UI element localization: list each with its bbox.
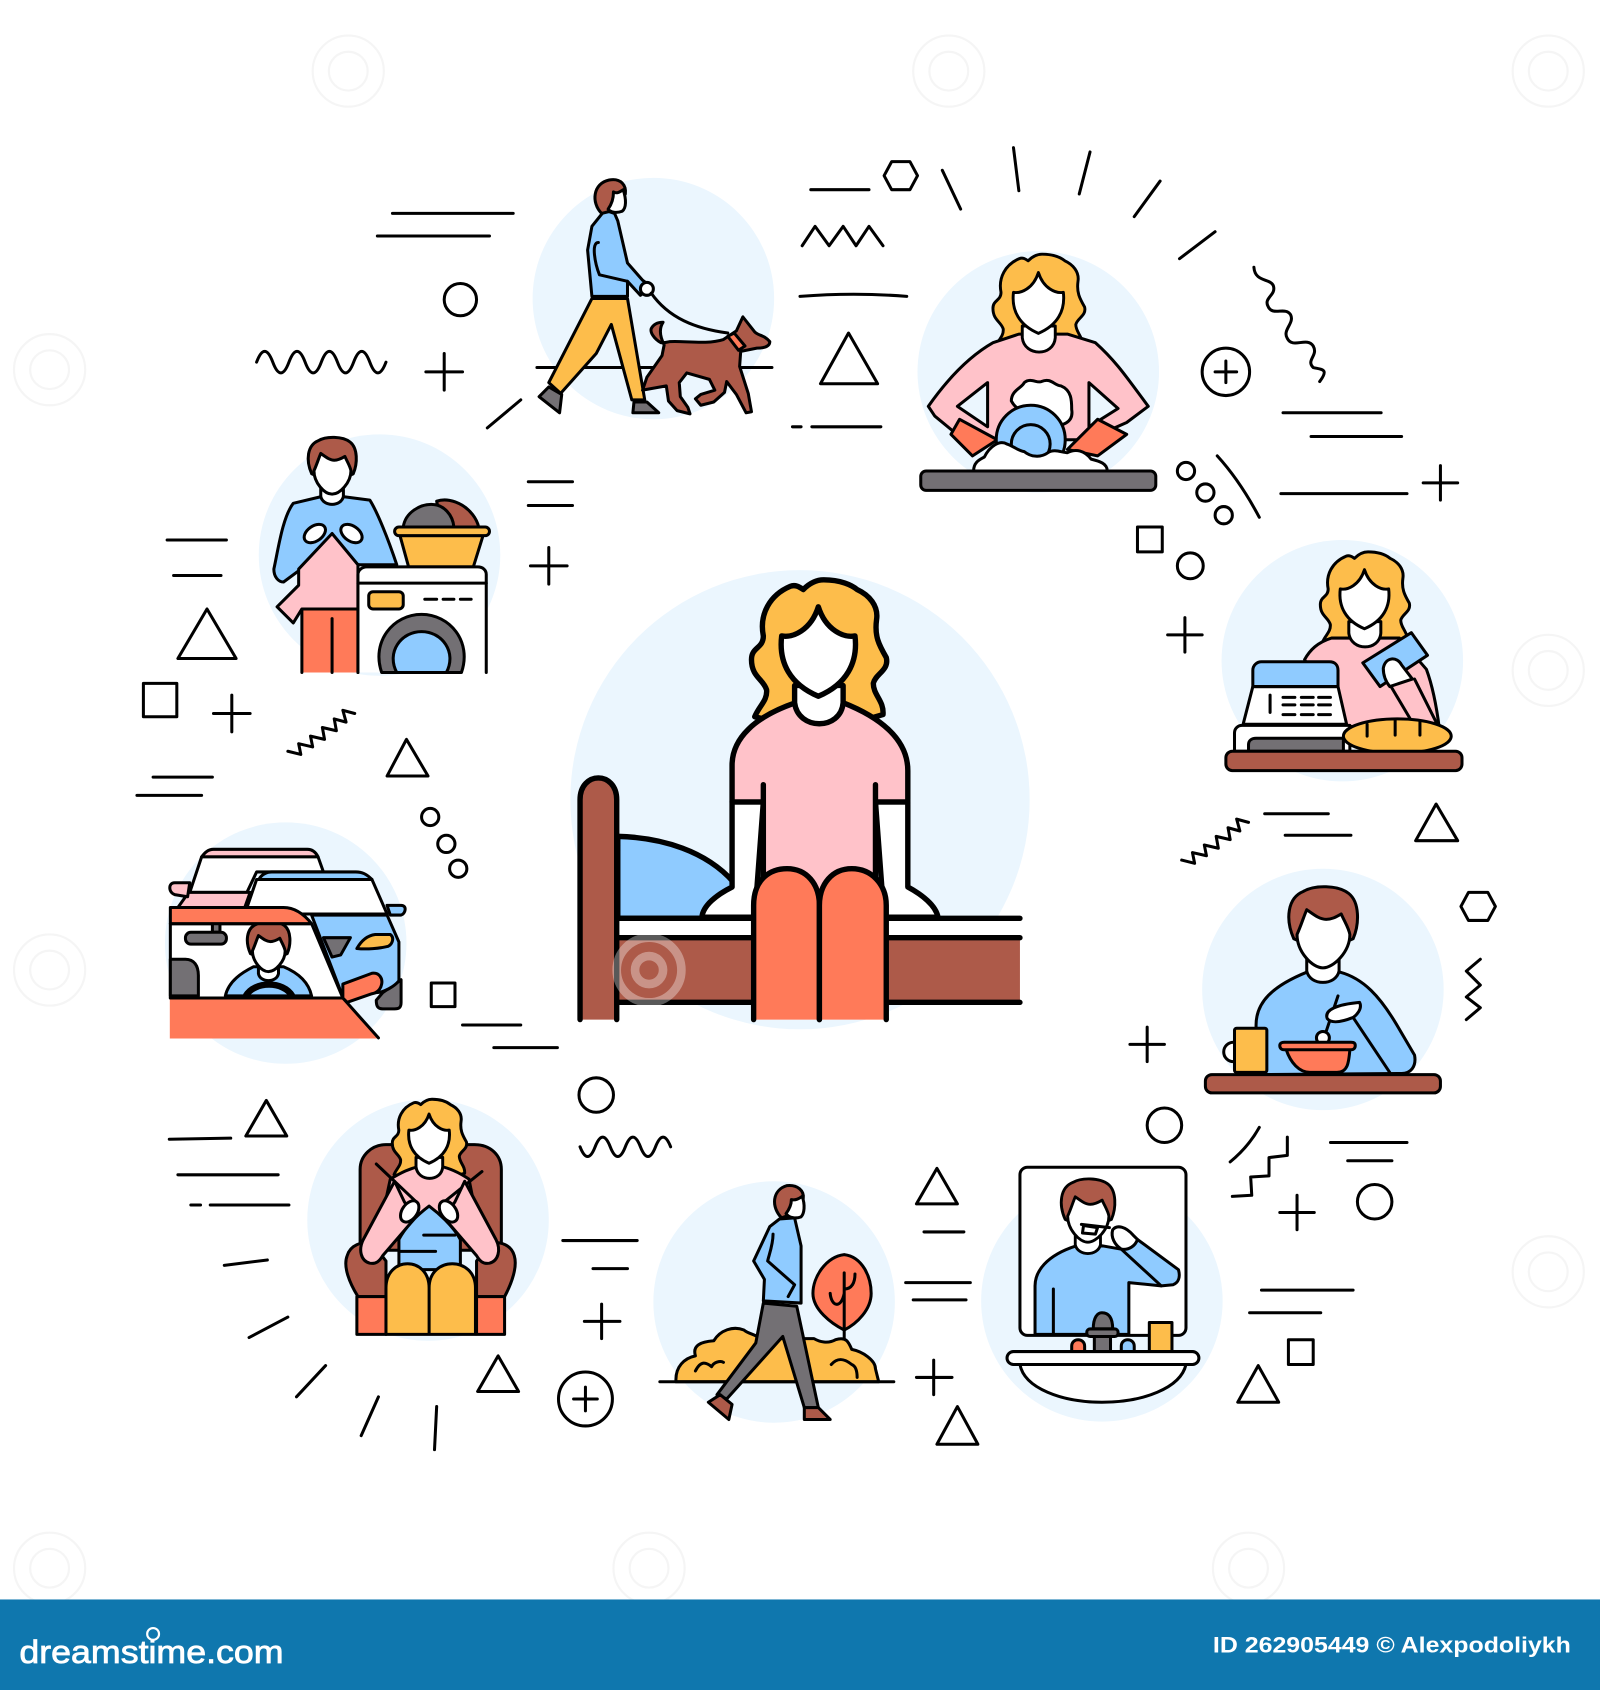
illustration: woman washing dishes (918, 251, 1159, 493)
pink clothing (277, 534, 358, 623)
sink basin (1020, 1365, 1186, 1402)
hair (993, 254, 1085, 358)
blue sweater (1256, 972, 1415, 1075)
illustration: man walking in park (653, 1181, 895, 1423)
illustration: woman at cash register (1222, 540, 1463, 781)
face and neck (409, 1114, 450, 1178)
pink sweater (928, 334, 1148, 440)
bed headboard post (580, 778, 617, 1020)
blue car (245, 872, 405, 1009)
hand (1383, 659, 1412, 687)
cash register drawer (1249, 738, 1343, 751)
shoes (708, 1395, 830, 1419)
display buttons (1270, 695, 1330, 715)
card (1363, 633, 1427, 687)
foam at sink (974, 443, 1107, 471)
bush marks (695, 1360, 857, 1377)
bottles and cup (1072, 1322, 1172, 1352)
blue sweater (1035, 1239, 1179, 1334)
banner footer (0, 1599, 1600, 1690)
face and neck (781, 607, 856, 724)
background circle (165, 822, 406, 1064)
hair (1320, 552, 1410, 653)
decorative shapes: top right burst (942, 148, 1458, 652)
background circle (307, 1099, 549, 1341)
hands (301, 521, 366, 546)
decorative shapes: lower right (1130, 1027, 1407, 1402)
background circle (259, 434, 500, 676)
background circle (1202, 869, 1444, 1110)
face and neck (1340, 570, 1389, 647)
trousers (302, 607, 358, 673)
illustration: man doing laundry (259, 434, 500, 676)
side mirror (343, 973, 382, 1002)
illustration: man brushing teeth (981, 1167, 1223, 1422)
pillow (618, 836, 733, 918)
background circle (570, 570, 1030, 1029)
shoes (539, 387, 659, 413)
trousers (717, 1303, 818, 1408)
armchair back (360, 1145, 501, 1250)
hair (392, 1099, 467, 1183)
decorative shapes: top centre (792, 162, 918, 427)
cash register top (1253, 662, 1338, 687)
watermark on bed (617, 938, 681, 1002)
forearm line (1353, 1017, 1390, 1072)
trouser seam (331, 619, 333, 673)
sleeve line (594, 243, 627, 281)
car bonnet (170, 998, 378, 1038)
decorative shapes: top left (257, 213, 573, 584)
background circle (653, 1181, 895, 1423)
hand and spoon (1316, 996, 1360, 1044)
background circle (533, 178, 774, 419)
arm line (1390, 679, 1439, 729)
rear view mirror (185, 923, 226, 944)
counter (1205, 1075, 1440, 1093)
cloth lines (400, 1235, 455, 1251)
trousers (549, 299, 645, 400)
mirror (1020, 1167, 1186, 1335)
hair (751, 580, 887, 733)
decorative shapes: right (1182, 804, 1495, 1020)
jacket (754, 1218, 801, 1303)
pink car (170, 849, 323, 908)
car roof strip (170, 908, 312, 924)
faucet (1087, 1313, 1118, 1352)
dog (643, 317, 770, 414)
counter (1226, 751, 1462, 771)
hands (397, 1197, 462, 1225)
illustration: man driving in traffic (165, 822, 406, 1064)
bed mattress and frame (617, 918, 1020, 1002)
gloves (951, 419, 1127, 456)
driver head (247, 921, 290, 981)
ground line (537, 366, 772, 369)
plate (996, 405, 1065, 474)
foam above plate (1011, 380, 1072, 425)
washing machine (358, 567, 486, 673)
steering wheel (246, 985, 292, 996)
hand (640, 282, 653, 295)
needles (376, 1164, 482, 1203)
head (595, 180, 625, 213)
armchair arms (346, 1243, 515, 1297)
sink counter (921, 471, 1156, 490)
armpit gaps (957, 383, 1118, 427)
head (775, 1185, 804, 1218)
laundry clothes (403, 500, 479, 527)
driver body (225, 967, 312, 996)
decorative shapes: bottom centre (906, 1168, 978, 1444)
knitting cloth (399, 1206, 460, 1270)
pink sweater (377, 1166, 481, 1239)
illustration: man walking a dog (533, 178, 774, 419)
image id and author: ID 262905449 © Alexpodoliykh (1213, 1632, 1571, 1657)
toothbrush and hand (1081, 1224, 1137, 1249)
bushes (676, 1328, 879, 1382)
background circle (981, 1180, 1223, 1422)
bowl (1280, 1042, 1355, 1072)
background circle (918, 251, 1159, 493)
leash (651, 293, 728, 333)
arms (361, 1181, 499, 1263)
illustration: man eating breakfast (1202, 869, 1444, 1110)
logo spiral (147, 1628, 159, 1640)
cash register mid (1243, 687, 1347, 724)
logo: dreamstime.com (19, 1634, 284, 1670)
pink t-shirt (732, 703, 908, 895)
head (1061, 1179, 1115, 1254)
sink rim (1007, 1352, 1199, 1365)
face and neck (1013, 273, 1064, 352)
seat (170, 959, 198, 996)
laundry basket (395, 527, 489, 567)
decorative shapes: bottom left burst (169, 1078, 671, 1450)
blue sweater (274, 497, 397, 582)
bonnet top line (170, 998, 378, 1038)
arms (702, 802, 938, 917)
sleeve line (1053, 1249, 1161, 1334)
head (308, 437, 356, 504)
dog collar (728, 333, 745, 350)
pink top (1305, 638, 1439, 729)
mug (1224, 1028, 1267, 1072)
armchair base (357, 1297, 505, 1334)
legs (386, 1264, 475, 1334)
background circle (1222, 540, 1463, 781)
ground line (660, 1380, 894, 1383)
decorative shapes: left (137, 540, 557, 1048)
tree (813, 1255, 871, 1354)
illustration: woman sitting on bed (570, 570, 1030, 1029)
illustration: woman knitting in armchair (307, 1099, 549, 1341)
windscreen interior (170, 924, 343, 998)
cash register base (1235, 725, 1350, 751)
jacket (588, 210, 651, 296)
bread (1343, 719, 1451, 753)
knees and legs (754, 869, 886, 1020)
head (1289, 887, 1358, 982)
arm lines (768, 1234, 795, 1297)
